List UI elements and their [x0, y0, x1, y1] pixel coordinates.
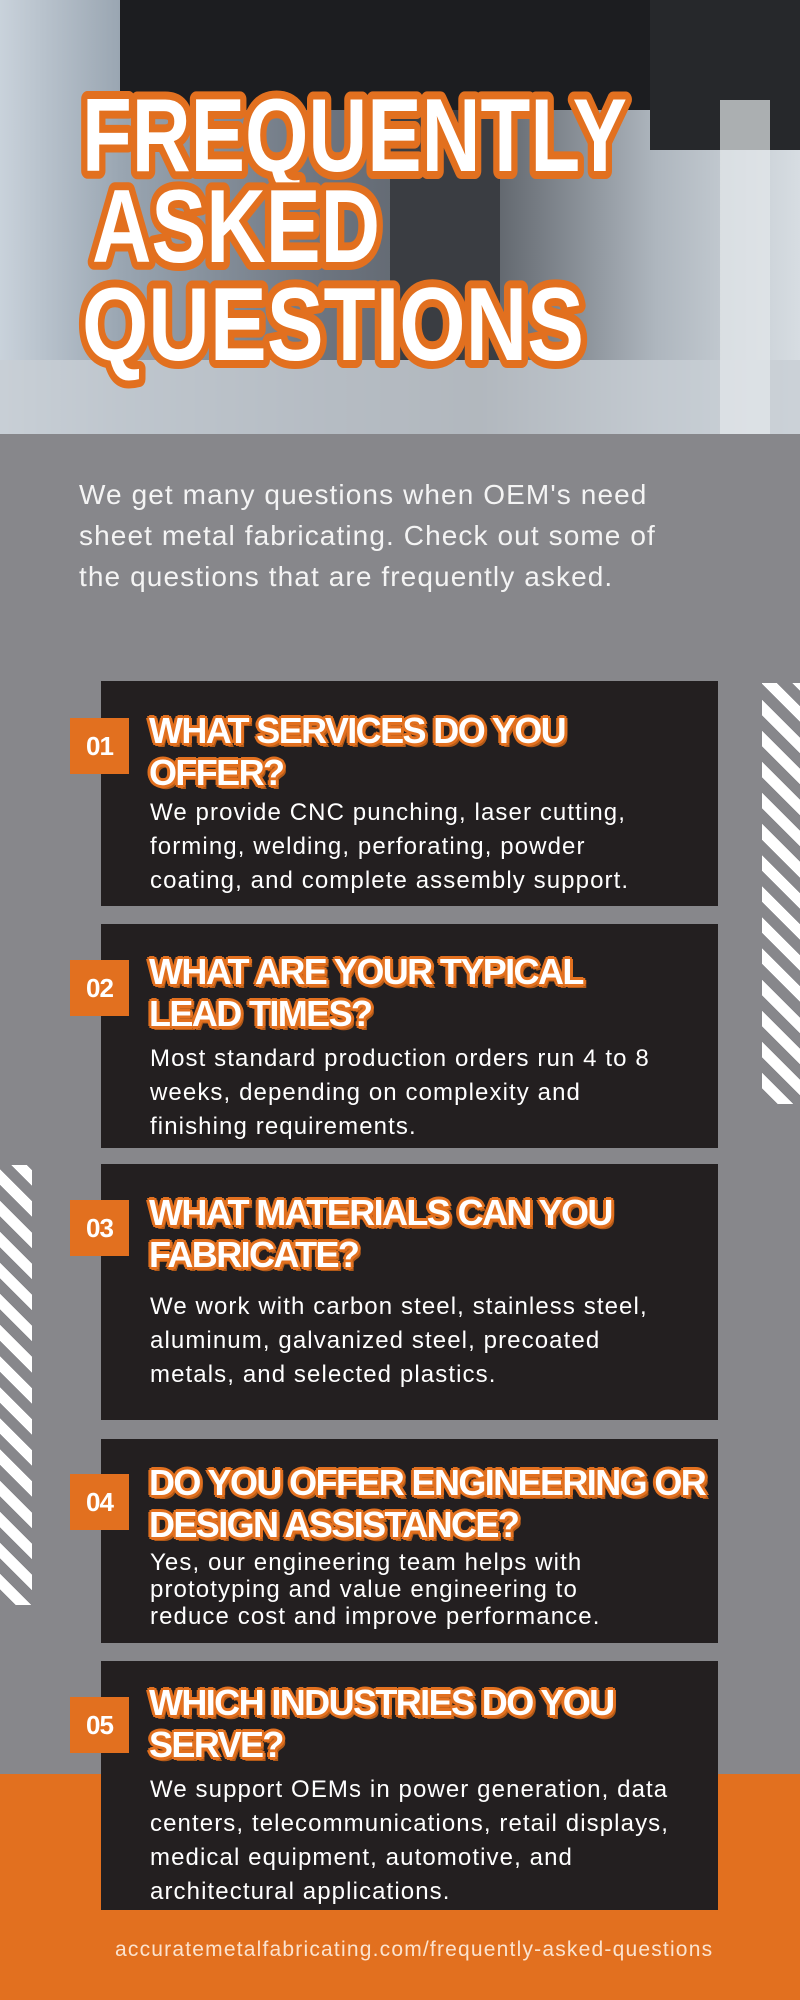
- heading 5: WHICH INDUSTRIES DO YOU: [149, 1682, 614, 1723]
- card 5: [101, 1661, 718, 1910]
- title: ASKED: [92, 169, 380, 285]
- orange footer band: [0, 1774, 800, 2000]
- answer 5: architectural applications.: [150, 1878, 451, 1905]
- intro text: We get many questions when OEM's need: [79, 479, 647, 510]
- badge 01: [70, 718, 129, 774]
- badge 04: [70, 1474, 129, 1530]
- heading 5: SERVE?: [149, 1724, 283, 1765]
- answer 1: coating, and complete assembly support.: [150, 867, 629, 894]
- badge 05: 05: [86, 1710, 113, 1740]
- badge 01: 01: [86, 731, 113, 761]
- heading 3: WHAT MATERIALS CAN YOU: [149, 1192, 612, 1233]
- intro text: the questions that are frequently asked.: [79, 561, 613, 592]
- heading 3: FABRICATE?: [149, 1234, 358, 1275]
- intro text: [79, 479, 656, 592]
- answer 3: We work with carbon steel, stainless steel,: [150, 1293, 648, 1320]
- heading 2: WHAT ARE YOUR TYPICAL: [149, 951, 583, 992]
- answer 4: prototyping and value engineering to: [150, 1576, 578, 1603]
- footer url: accuratemetalfabricating.com/frequently-asked-questions: [115, 1938, 713, 1961]
- answer 1: forming, welding, perforating, powder: [150, 833, 586, 860]
- badge 02: 02: [86, 973, 113, 1003]
- card 4: [101, 1439, 718, 1643]
- heading 5: [146, 1682, 616, 1765]
- heading 1: WHAT SERVICES DO YOU: [149, 710, 565, 751]
- answer 4: reduce cost and improve performance.: [150, 1603, 600, 1630]
- intro text: sheet metal fabricating. Check out some of: [79, 520, 656, 551]
- answer 1: We provide CNC punching, laser cutting,: [150, 799, 626, 826]
- title: FREQUENTLY: [82, 78, 627, 194]
- heading 4: [148, 1462, 709, 1545]
- card 2: [101, 924, 718, 1148]
- heading 2: [146, 951, 586, 1034]
- badge 03: 03: [86, 1213, 113, 1243]
- heading 1: [146, 710, 568, 793]
- title: QUESTIONS: [82, 267, 584, 383]
- heading 4: DESIGN ASSISTANCE?: [149, 1504, 518, 1545]
- header photo: [0, 0, 800, 434]
- stripes left: [0, 1165, 32, 1605]
- answer 2: finishing requirements.: [150, 1113, 417, 1140]
- badge 05: [70, 1697, 129, 1753]
- card 1: [101, 681, 718, 906]
- answer 3: [150, 1293, 648, 1388]
- answer 5: medical equipment, automotive, and: [150, 1844, 573, 1871]
- heading 1: OFFER?: [149, 752, 283, 793]
- answer 5: We support OEMs in power generation, data: [150, 1776, 668, 1803]
- answer 4: Yes, our engineering team helps with: [150, 1549, 582, 1576]
- answer 3: metals, and selected plastics.: [150, 1361, 496, 1388]
- answer 4: [150, 1549, 600, 1630]
- title: [82, 78, 627, 383]
- heading 3: [146, 1192, 614, 1275]
- answer 2: [150, 1045, 650, 1140]
- heading 2: LEAD TIMES?: [149, 993, 371, 1034]
- badge 03: [70, 1200, 129, 1256]
- answer 5: [150, 1776, 669, 1905]
- answer 3: aluminum, galvanized steel, precoated: [150, 1327, 600, 1354]
- card 3: [101, 1164, 718, 1420]
- answer 1: [150, 799, 629, 894]
- answer 2: Most standard production orders run 4 to 8: [150, 1045, 650, 1072]
- stripes right: [762, 683, 800, 1104]
- heading 4: DO YOU OFFER ENGINEERING OR: [149, 1462, 705, 1503]
- answer 2: weeks, depending on complexity and: [150, 1079, 581, 1106]
- badge 02: [70, 960, 129, 1016]
- answer 5: centers, telecommunications, retail displays,: [150, 1810, 669, 1837]
- badge 04: 04: [86, 1487, 113, 1517]
